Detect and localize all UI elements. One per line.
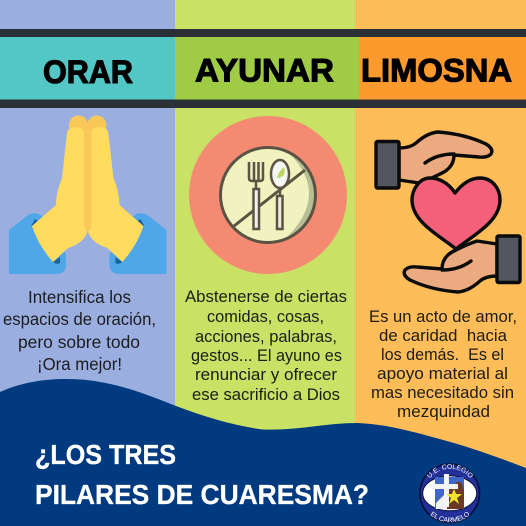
text block: ayunar: comidas, cosas, bbox=[207, 308, 324, 326]
crest text: bottom: EL CARMELO bbox=[430, 512, 469, 522]
text block: limosna: mas necesitado sin bbox=[371, 384, 514, 402]
navy wave footer bbox=[0, 379, 526, 526]
heading: orar: ORAR bbox=[43, 54, 133, 90]
text block: ayunar bbox=[185, 288, 347, 404]
title bbox=[35, 439, 369, 510]
fork bbox=[249, 162, 263, 229]
heading: limosna: LIMOSNA bbox=[361, 52, 512, 88]
crest text: top: U.E. COLEGIO bbox=[426, 464, 473, 478]
text block: ayunar: Abstenerse de ciertas bbox=[185, 288, 347, 306]
header band bbox=[0, 29, 526, 108]
text block: ayunar: acciones, palabras, bbox=[195, 328, 337, 346]
right hand bbox=[88, 127, 143, 262]
icon: school crest bbox=[419, 463, 480, 524]
icon: praying hands bbox=[9, 116, 166, 274]
text block: ayunar: renunciar y ofrecer bbox=[195, 366, 338, 384]
text block: orar: Intensifica los bbox=[28, 287, 131, 307]
title: PILARES DE CUARESMA? bbox=[35, 479, 369, 510]
text block: ayunar: ese sacrificio a Dios bbox=[192, 386, 340, 404]
text block: orar: ¡Ora mejor! bbox=[37, 354, 122, 374]
upper hand bbox=[376, 132, 492, 188]
left sleeve bbox=[9, 213, 66, 274]
text block: ayunar: gestos... El ayuno es bbox=[191, 347, 342, 365]
heart bbox=[412, 178, 500, 249]
title: ¿LOS TRES bbox=[35, 439, 176, 470]
right sleeve bbox=[109, 213, 166, 274]
icon: no food plate bbox=[189, 116, 347, 274]
text block: orar: pero sobre todo bbox=[18, 332, 140, 352]
text block: orar: espacios de oración, bbox=[3, 309, 156, 329]
text block: limosna: de caridad hacia bbox=[379, 327, 507, 345]
text block: limosna bbox=[369, 308, 517, 421]
lower hand bbox=[404, 236, 520, 292]
text block: limosna: mezquindad bbox=[397, 403, 490, 421]
left hand bbox=[32, 127, 88, 262]
icon: hands holding heart bbox=[376, 132, 520, 292]
text block: orar bbox=[3, 287, 156, 374]
plate bbox=[220, 148, 316, 242]
slash bbox=[234, 170, 305, 226]
spoon bbox=[271, 160, 289, 229]
text block: limosna: Es un acto de amor, bbox=[369, 308, 517, 326]
heading: ayunar: AYUNAR bbox=[195, 52, 334, 88]
text block: limosna: los demás. Es el bbox=[381, 346, 504, 364]
red circle bbox=[189, 116, 347, 274]
back fingers bbox=[69, 116, 106, 230]
text block: limosna: apoyo material al bbox=[377, 365, 508, 383]
